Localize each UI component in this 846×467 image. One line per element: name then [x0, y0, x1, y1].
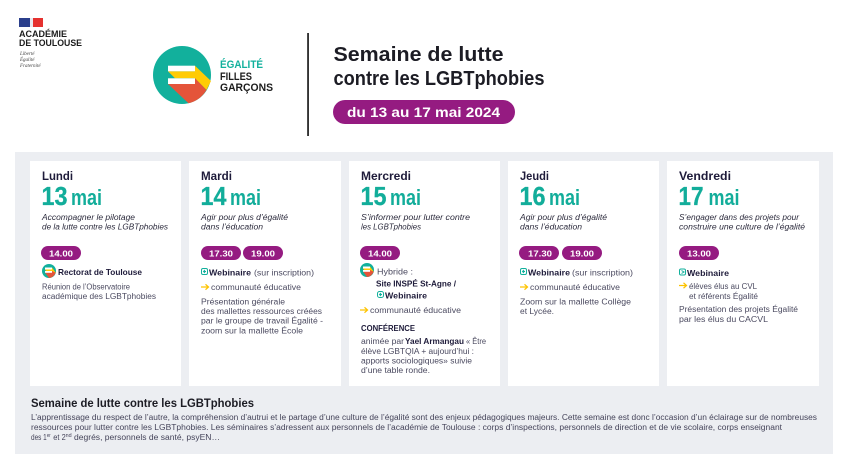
description: académique des LGBTphobies: [42, 292, 156, 301]
icon: logo: [360, 263, 374, 277]
theme: S’engager dans des projets pour: [679, 213, 799, 222]
logo: Égalité Filles Garçons: [153, 46, 273, 104]
format: [376, 266, 457, 288]
theme: [41, 213, 168, 232]
date: [42, 181, 102, 211]
icon: equal sign circle: [153, 46, 211, 104]
footer heading: Semaine de lutte contre les LGBTphobies: [31, 396, 254, 410]
footer text: et 2: [53, 433, 66, 442]
panel: Jeudi: [508, 161, 659, 386]
day name: Lundi: [42, 169, 73, 183]
conference description: apports sociologiques» suivie: [361, 356, 473, 366]
date: 17: [678, 181, 704, 211]
panel: Lundi: [30, 161, 181, 386]
day name: Jeudi: [520, 169, 549, 183]
format: [209, 268, 314, 278]
motto: Fraternité: [19, 64, 41, 69]
motto: Liberté: [19, 52, 35, 57]
date: [678, 181, 740, 211]
format: [528, 268, 633, 278]
icon: arrow: [520, 284, 528, 290]
footer text: er: [47, 433, 51, 439]
description: [679, 305, 799, 324]
date: 15: [360, 181, 386, 211]
logo wordmark: [220, 58, 273, 94]
description: par le groupe de travail Égalité -: [201, 316, 323, 326]
audience: communauté éducative: [530, 283, 621, 292]
icon: webinar: [680, 269, 686, 275]
day name: Mercredi: [361, 169, 411, 183]
time pills: [519, 246, 602, 260]
footer text: nd: [66, 433, 72, 439]
footer text: L’apprentissage du respect de l’autre, la compréhension d’autrui et le partage d’une culture de l’égalité sont des enjeux pédagogiques majeurs. Cette semaine est donc l’occasion d’un éclairage sur de nombreuses: [31, 413, 817, 422]
title: [334, 44, 544, 90]
conference description: d’une table ronde.: [361, 366, 430, 375]
format: Webinaire: [528, 268, 570, 278]
theme: S’informer pour lutter contre: [361, 213, 471, 222]
date pill: du 13 au 17 mai 2024: [347, 105, 501, 120]
icon: webinar: [378, 292, 384, 298]
time pill: 14.00: [368, 248, 392, 258]
theme: [200, 213, 289, 232]
theme: [679, 213, 806, 232]
conference heading: CONFÉRENCE: [361, 324, 416, 333]
logo: Académie de Toulouse: [19, 18, 82, 69]
time pill: [679, 246, 719, 260]
description: [201, 298, 323, 336]
time pill: [41, 246, 81, 260]
footer text: ressources pour lutter contre les LGBTphobies. Les séminaires s’adressent aux personnels de l’académie de Toulouse : corps d’inspections, personnels de direction et de vie scolaire, corps enseignant: [31, 423, 783, 432]
footer text: degrés, personnels de santé, psyEN…: [74, 433, 220, 442]
theme: les LGBTphobies: [361, 222, 421, 232]
audience: communauté éducative: [211, 283, 302, 292]
description: Présentation des projets Égalité: [679, 305, 799, 314]
icon: webinar: [202, 268, 208, 274]
theme: [361, 213, 471, 232]
panel: Vendredi: [667, 161, 819, 386]
theme: Accompagner le pilotage: [41, 213, 136, 222]
time pills: 19.00: [251, 248, 275, 258]
date: mai: [708, 185, 740, 210]
panel: Mercredi: [349, 161, 500, 386]
time pill: [360, 246, 400, 260]
day name: Mardi: [201, 169, 232, 183]
conference description: « Être: [466, 337, 487, 346]
panel: programme background: [15, 152, 833, 454]
logo wordmark: GARÇONS: [220, 82, 273, 94]
icon: logo: [42, 264, 56, 278]
theme: dans l’éducation: [201, 222, 264, 232]
description: [42, 282, 156, 301]
location: Rectorat de Toulouse: [58, 267, 142, 277]
time pills: 17.30: [209, 248, 233, 258]
description: [520, 298, 632, 316]
theme: Agir pour plus d’égalité: [200, 213, 289, 222]
audience: [689, 282, 759, 301]
motto: Égalité: [19, 57, 35, 63]
theme: de la lutte contre les LGBTphobies: [42, 222, 168, 232]
description: des mallettes ressources créées: [201, 307, 322, 316]
academy name: [19, 29, 82, 49]
theme: dans l’éducation: [520, 222, 583, 232]
description: et Lycée.: [520, 307, 554, 316]
conference description: animée par: [361, 337, 404, 346]
date: mai: [71, 185, 102, 210]
format: Hybride :: [377, 266, 413, 276]
date pill: [333, 100, 515, 124]
conference description: élève LGBTQIA + aujourd’hui :: [361, 347, 474, 356]
academy name: ACADÉMIE: [19, 29, 67, 40]
webinar label: Webinaire: [385, 290, 427, 300]
motto: [19, 52, 41, 69]
theme: [519, 213, 608, 232]
description: Présentation générale: [201, 298, 286, 306]
format: Webinaire: [687, 268, 729, 278]
audience: communauté éducative: [370, 306, 462, 315]
logo wordmark: FILLES: [220, 71, 252, 83]
format: (sur inscription): [254, 268, 314, 278]
academy name: DE TOULOUSE: [19, 38, 82, 49]
footer text: des 1: [31, 433, 47, 442]
conference description: Yael Armangau: [405, 336, 464, 346]
day name: Vendredi: [679, 169, 731, 183]
title: contre les LGBTphobies: [334, 68, 544, 90]
date: 14: [200, 181, 227, 211]
date: 16: [520, 181, 546, 211]
format: Webinaire: [209, 268, 251, 278]
theme: construire une culture de l’égalité: [679, 222, 806, 232]
icon: arrow: [679, 283, 686, 288]
date: [360, 181, 421, 211]
description: Réunion de l’Observatoire: [42, 282, 131, 292]
description: zoom sur la mallette École: [201, 326, 304, 336]
format: Site INSPÉ St-Agne /: [376, 278, 457, 288]
description: Zoom sur la mallette Collège: [520, 298, 632, 306]
description: par les élus du CACVL: [679, 315, 769, 324]
panel: Mardi: [189, 161, 341, 386]
format: (sur inscription): [572, 268, 633, 278]
date: mai: [549, 185, 580, 210]
date: [200, 181, 261, 211]
theme: Agir pour plus d’égalité: [519, 213, 608, 222]
time pills: [201, 246, 283, 260]
icon: webinar: [520, 268, 526, 274]
time pill: 14.00: [49, 248, 73, 258]
time pills: 17.30: [528, 248, 552, 258]
audience: et référents Égalité: [689, 292, 759, 301]
icon: arrow: [201, 284, 208, 290]
date: mai: [230, 185, 261, 210]
title: Semaine de lutte: [334, 44, 504, 66]
time pill: 13.00: [687, 248, 711, 258]
icon: French flag: [19, 18, 43, 27]
conference description: [361, 336, 487, 375]
date: [520, 181, 580, 211]
date: 13: [42, 181, 68, 211]
footer text: [31, 413, 817, 442]
icon: arrow: [360, 307, 368, 313]
date: mai: [390, 185, 421, 210]
time pills: 19.00: [570, 248, 594, 258]
logo wordmark: ÉGALITÉ: [220, 58, 263, 71]
audience: élèves élus au CVL: [689, 282, 758, 291]
